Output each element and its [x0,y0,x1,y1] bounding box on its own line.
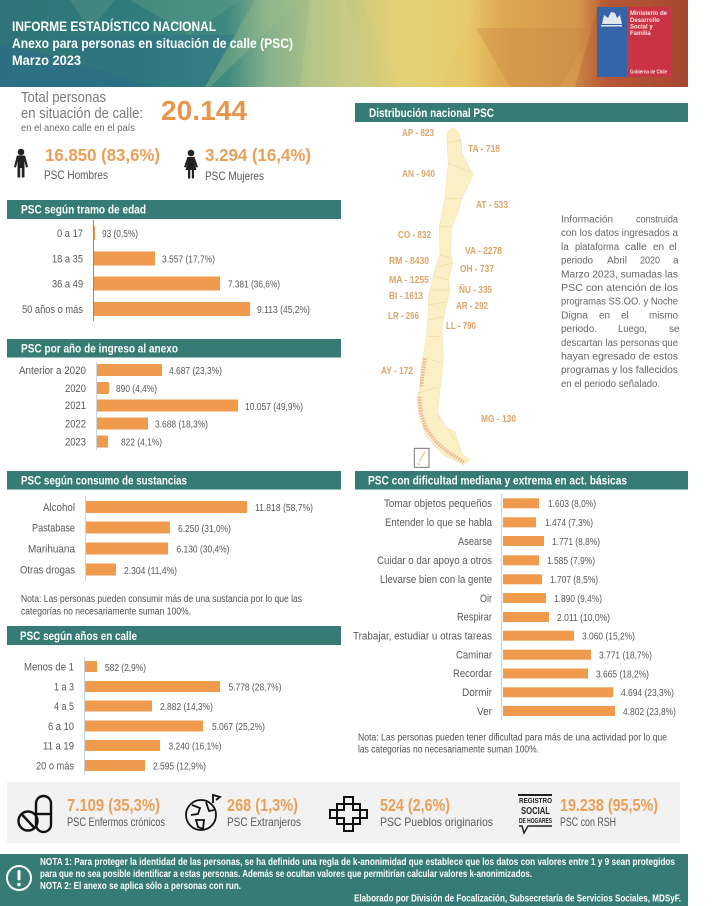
map region labels: AN - 940 [402,169,435,180]
text block: información construida: el [669,242,677,253]
heading: año de ingreso: PSC por año de ingreso al anexo [21,342,178,356]
total personas label [21,90,143,134]
text block: información construida: plataforma [575,242,619,253]
bar chart: año de ingreso: 3.688 (18,3%) [155,420,208,430]
total personas label: en situación de calle: [21,106,143,122]
stat: RSH [560,795,658,829]
bar chart: consumo de sustancias: Marihuana [28,544,76,556]
panel: indicators [7,782,680,843]
stat: enfermos crónicos: 7.109 (35,3%) [67,795,160,815]
text block: información construida: con los datos ingresados a [561,228,678,239]
logo: Ministerio de Desarrollo Social y Familia: Social y [630,24,653,30]
bar chart: dificultad en actividades básicas: Asearse [458,536,492,548]
footer notes: para que no sea posible identificar a estas personas. Además se ocultan valores que permitirían calcular valores k-anonimizados. [40,869,532,880]
bar chart: años en calle: 5.778 (28,7%) [228,682,282,694]
men stat: 16.850 (83,6%) [45,145,160,165]
logo: Ministerio de Desarrollo Social y Familia: Familia [630,31,651,37]
map region labels: TA - 718 [468,144,500,155]
bar chart: dificultad en actividades básicas: 4.694 (23,3%) [621,688,674,699]
icon: registro social de hogares: SOCIAL [521,806,550,817]
bar chart: dificultad en actividades básicas: Dormir [462,687,492,699]
map region labels: AY - 172 [381,366,413,377]
bar chart: año de ingreso: 10.057 (49,9%) [245,402,303,413]
bar chart: dificultad en actividades básicas: Respirar [457,612,492,624]
heading: dificultad en actividades básicas: PSC con dificultad mediana y extrema en act. básicas [368,474,627,488]
text block: información construida: periodo [561,256,593,267]
bar chart: dificultad en actividades básicas: Entender lo que se habla [385,517,493,529]
icon: woman [184,150,198,178]
note: dificultad [358,732,667,756]
map of Chile [414,127,473,467]
stat: extranjeros: 268 (1,3%) [227,795,298,815]
bar chart: dificultad en actividades básicas: 1.603 (8,0%) [548,499,596,510]
bar chart: dificultad en actividades básicas: 1.771 (8,8%) [552,537,600,548]
bar chart: dificultad en actividades básicas: Oir [480,593,492,605]
bar chart: tramo de edad: 50 años o más [22,304,83,316]
bar chart: dificultad en actividades básicas: Llevarse bien con la gente [380,574,492,586]
bar chart: tramo de edad: 3.557 (17,7%) [162,254,215,266]
text block: información construida: hayan egresado de estos [561,352,678,362]
bar chart: tramo de edad [22,220,310,321]
map region labels [381,128,516,425]
map region labels: BI - 1613 [389,291,423,302]
stat: pueblos originarios: 524 (2,6%) [380,795,450,815]
bar chart: años en calle: 20 o más [36,760,74,772]
bar chart: años en calle: 6 a 10 [48,721,74,733]
heading: consumo de sustancias: PSC según consumo de sustancias [21,474,187,488]
icon: man [14,149,28,178]
text block: información construida: mismo [649,310,678,321]
bar chart: dificultad en actividades básicas: Trabajar, estudiar u otras tareas [353,630,492,642]
stat: pueblos originarios: PSC Pueblos originarios [380,815,493,829]
text block: información construida: el [621,310,629,321]
bar chart: tramo de edad: 93 (0,5%) [102,229,138,240]
bar chart: tramo de edad: 0 a 17 [57,228,83,240]
text block: información construida: periodo. [561,324,597,335]
bar chart: dificultad en actividades básicas: Cuidar o dar apoyo a otros [377,555,492,567]
bar chart: años en calle: 582 (2,9%) [105,663,146,674]
bar chart: años en calle: 4 a 5 [54,701,74,713]
note: dificultad: Nota: Las personas pueden tener dificultad para más de una actividad por lo que [358,732,667,744]
bar chart: consumo de sustancias: Otras drogas [20,564,75,576]
bar chart: año de ingreso: 2020 [65,383,86,395]
text block: información construida: Información [561,214,613,226]
bar chart: dificultad en actividades básicas: 3.060 (15,2%) [582,632,635,642]
bar chart: tramo de edad: 18 a 35 [52,254,83,266]
bar chart: años en calle: Menos de 1 [24,662,74,674]
total personas label: en el anexo calle en el país [21,122,135,134]
total number: 20.144 [161,95,247,126]
logo: Ministerio de Desarrollo Social y Familia [597,7,671,77]
bar chart: dificultad en actividades básicas: 3.665 (18,2%) [596,670,649,680]
note: dificultad: las categorías no necesariamente suman 100%. [358,744,539,756]
note: sustancias: Nota: Las personas pueden consumir más de una sustancia por lo que las [21,594,302,605]
bar chart: dificultad en actividades básicas: 2.011 (10,0%) [557,613,610,624]
stat: RSH: 19.238 (95,5%) [560,795,658,815]
note: sustancias: categorías no necesariamente suman 100%. [21,606,191,618]
text block: información construida: la [561,242,569,253]
map region labels: OH - 737 [460,264,494,275]
bar chart: años en calle: 11 a 19 [43,740,74,752]
bar chart: dificultad en actividades básicas: Caminar [456,650,492,662]
logo: Ministerio de Desarrollo Social y Familia: Desarrollo [630,18,660,24]
map region labels: MG - 130 [481,414,516,425]
men stat: PSC Hombres [44,168,108,182]
panel: distribución nacional heading [355,103,688,122]
heading: años en calle: PSC según años en calle [20,629,137,643]
bar chart: año de ingreso: 2022 [65,418,86,430]
bar chart: tramo de edad: 7.381 (36,6%) [228,280,280,290]
map region labels: ÑU - 335 [459,283,492,296]
heading: años en calle [7,626,341,645]
note: sustancias [21,594,302,618]
text block: información construida: a [673,256,679,267]
bar chart: dificultad en actividades básicas: 1.474 (7,3%) [545,518,593,529]
bar chart: consumo de sustancias: Pastabase [32,522,75,534]
text block: información construida: Luego, [618,324,647,335]
bar chart: dificultad en actividades básicas: Tomar objetos pequeños [384,498,492,510]
text block: información construida: se [669,324,680,335]
title: INFORME ESTADÍSTICO NACIONAL [12,18,216,34]
stat: extranjeros: PSC Extranjeros [227,815,301,829]
women stat: 3.294 (16,4%) [205,145,311,165]
bar chart: año de ingreso: 890 (4,4%) [116,384,157,395]
women stat [205,145,311,183]
stat: enfermos crónicos: PSC Enfermos crónicos [67,815,165,829]
bar chart: años en calle: 2.595 (12,9%) [153,762,206,772]
bar chart: dificultad en actividades básicas [353,494,676,720]
bar chart: año de ingreso: 2023 [65,436,86,448]
text block: información construida [561,214,680,390]
bar chart: dificultad en actividades básicas: Ver [477,706,492,718]
bar chart: dificultad en actividades básicas: Recordar [453,668,492,680]
bar chart: años en calle: 1 a 3 [54,682,74,694]
stat: extranjeros [227,795,301,829]
text block: información construida: en [653,242,664,253]
title: Anexo para personas en situación de calle (PSC) [12,35,293,51]
icon: registro social de hogares: DE HOGARES [519,818,552,825]
bar chart: años en calle [24,657,282,775]
text block: información construida: calle [625,242,647,253]
text block: información construida: descartan las personas que [561,338,678,349]
bar chart: año de ingreso: 822 (4,1%) [121,438,162,448]
heading: tramo de edad: PSC según tramo de edad [21,202,146,216]
title: Marzo 2023 [12,52,81,68]
bar chart: años en calle: 3.240 (16,1%) [168,742,222,752]
icon: pueblos originarios cross pattern [330,797,367,831]
map region labels: MA - 1255 [389,275,429,286]
bar chart: años en calle: 2.882 (14,3%) [160,702,213,713]
stat: RSH: PSC con RSH [560,815,616,829]
logo: Ministerio de Desarrollo Social y Familia: Ministerio de [630,11,668,17]
icon: globe [186,795,220,830]
bar chart: año de ingreso [19,362,303,450]
men stat [44,145,160,182]
footer notes: NOTA 2: El anexo se aplica sólo a personas con run. [40,881,241,892]
header banner [0,0,688,87]
bar chart: dificultad en actividades básicas: 1.890 (9,4%) [554,594,602,605]
text block: información construida: programas y los fallecidos [561,365,678,376]
text block: información construida: PSC con atención de los [561,283,678,294]
bar chart: año de ingreso: 2021 [65,400,86,412]
text block: información construida: programas SS.OO. y Noche [561,297,678,308]
bar chart: consumo de sustancias: 6.130 (30,4%) [176,544,230,556]
panel: distribución nacional heading: Distribución nacional PSC [369,106,494,120]
icon: registro social de hogares [518,794,552,833]
bar chart: dificultad en actividades básicas: 4.802 (23,8%) [623,707,676,718]
map region labels: LR - 266 [388,311,419,322]
map region labels: CO - 832 [398,230,431,241]
bar chart: años en calle: 5.067 (25,2%) [212,722,265,733]
icon: pills [18,796,51,832]
stat: pueblos originarios [380,795,493,829]
text block: información construida: en [599,310,610,321]
footer notes [40,857,681,904]
logo: Ministerio de Desarrollo Social y Familia: Gobierno de Chile [630,70,667,76]
map region labels: LL - 790 [446,321,476,332]
map region labels: AP - 823 [402,128,434,139]
text block: información construida: en el periodo señalado. [561,379,660,390]
heading: dificultad en actividades básicas [355,471,688,490]
bar chart: dificultad en actividades básicas: 1.585 (7,9%) [547,556,595,567]
bar chart: consumo de sustancias: 11.818 (58,7%) [255,503,313,514]
icon: registro social de hogares: REGISTRO [519,796,552,805]
bar chart: tramo de edad: 9.113 (45,2%) [257,305,310,316]
text block: información construida: Marzo 2023, sumadas las [561,269,678,280]
bar chart: consumo de sustancias: 6.250 (31,0%) [178,524,231,535]
women stat: PSC Mujeres [205,169,264,183]
title [12,18,293,68]
bar chart: año de ingreso: 4.687 (23,3%) [169,366,222,377]
text block: información construida: construida [636,214,678,226]
map region labels: VA - 2278 [465,246,502,257]
bar chart: consumo de sustancias: Alcohol [43,502,75,514]
heading: consumo de sustancias [7,471,341,490]
text block: información construida: Abril [607,256,627,267]
bar chart: tramo de edad: 36 a 49 [52,278,83,290]
map region labels: RM - 8430 [389,256,429,267]
heading: tramo de edad [7,200,341,219]
bar chart: consumo de sustancias: 2.304 (11,4%) [124,566,177,577]
map region labels: AT - 533 [476,200,508,211]
map region labels: AR - 292 [456,301,488,312]
bar chart: consumo de sustancias [20,496,313,581]
stat: enfermos crónicos [67,795,165,829]
heading: año de ingreso [7,339,341,358]
bar chart: dificultad en actividades básicas: 3.771 (18,7%) [599,650,652,662]
total personas label: Total personas [21,90,106,106]
icon: alert [7,866,31,890]
bar chart: año de ingreso: Anterior a 2020 [19,365,86,377]
bar chart: dificultad en actividades básicas: 1.707 (8,5%) [550,575,598,586]
text block: información construida: 2020 [640,256,660,267]
footer band [0,854,688,906]
text block: información construida: Digna [561,310,588,321]
